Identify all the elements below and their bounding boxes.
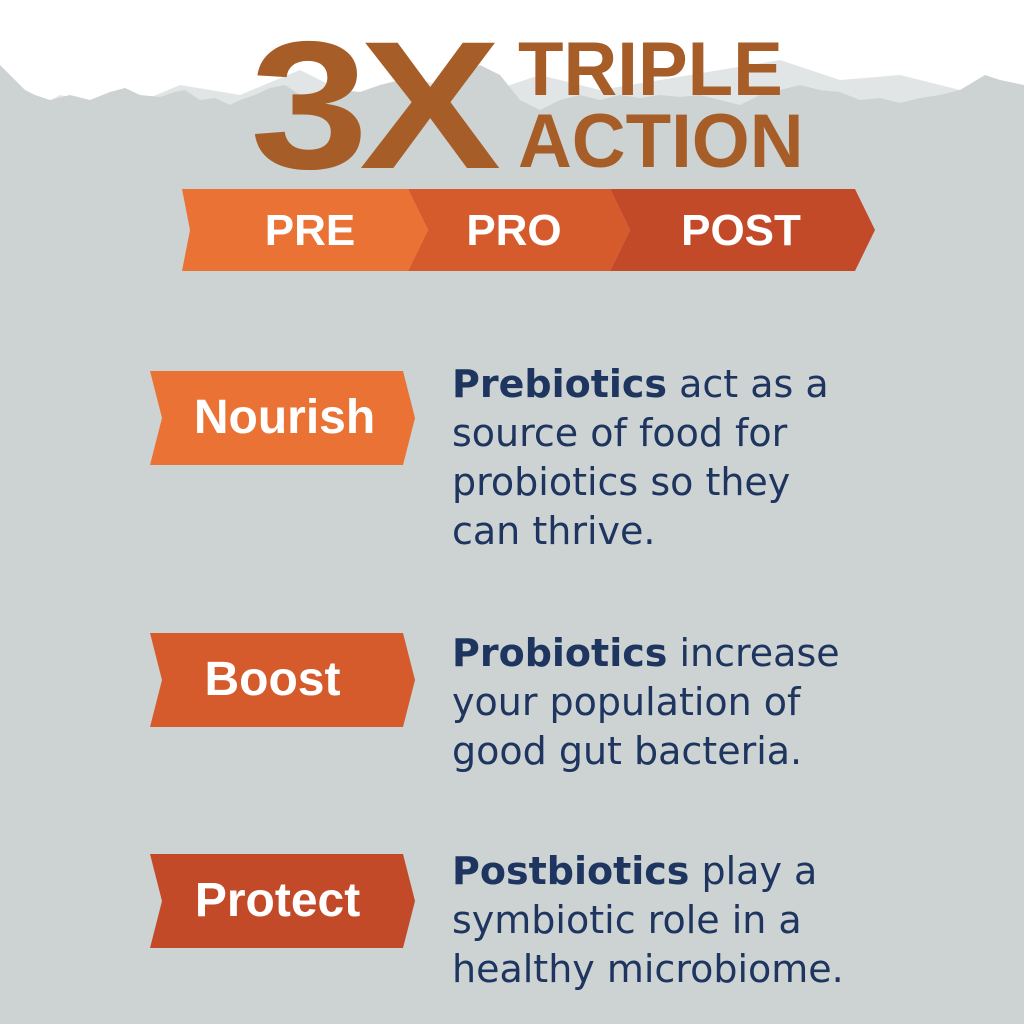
segment: PRE: [182, 189, 428, 271]
title: 3X: 3X: [250, 3, 492, 207]
text: probiotics: [452, 631, 840, 773]
text: postbiotics: symbiotic role in a: [452, 898, 802, 942]
segment: PRO: PRO: [466, 206, 562, 255]
text: postbiotics: Postbiotics play a: [452, 849, 817, 893]
text: postbiotics: healthy microbiome.: [452, 947, 844, 991]
tag: Boost: [150, 633, 415, 727]
tag: Protect: [150, 854, 415, 948]
tag: Nourish: Nourish: [194, 391, 375, 444]
tag: Nourish: [150, 371, 415, 465]
title: TRIPLE ACTION: [518, 27, 803, 184]
text: prebiotics: probiotics so they: [452, 460, 790, 504]
text: probiotics: Probiotics increase: [452, 631, 840, 675]
segment: POST: POST: [681, 206, 801, 255]
text: prebiotics: can thrive.: [452, 509, 655, 553]
text: probiotics: your population of: [452, 680, 800, 724]
text: probiotics: good gut bacteria.: [452, 729, 802, 773]
text: prebiotics: Prebiotics act as a: [452, 362, 829, 406]
background mountains: [0, 0, 1024, 110]
segment: PRE: PRE: [265, 206, 355, 255]
segment: POST: [610, 189, 875, 271]
title: TRIPLE ACTION: ACTION: [518, 99, 803, 184]
tag: Protect: Protect: [195, 874, 360, 927]
segment: PRO: [408, 189, 630, 271]
title: TRIPLE ACTION: TRIPLE: [518, 27, 783, 112]
text: prebiotics: [452, 362, 829, 553]
text: prebiotics: source of food for: [452, 411, 787, 455]
tag: Boost: Boost: [204, 653, 340, 706]
banner: pre pro post: [182, 189, 875, 271]
text: postbiotics: [452, 849, 844, 991]
